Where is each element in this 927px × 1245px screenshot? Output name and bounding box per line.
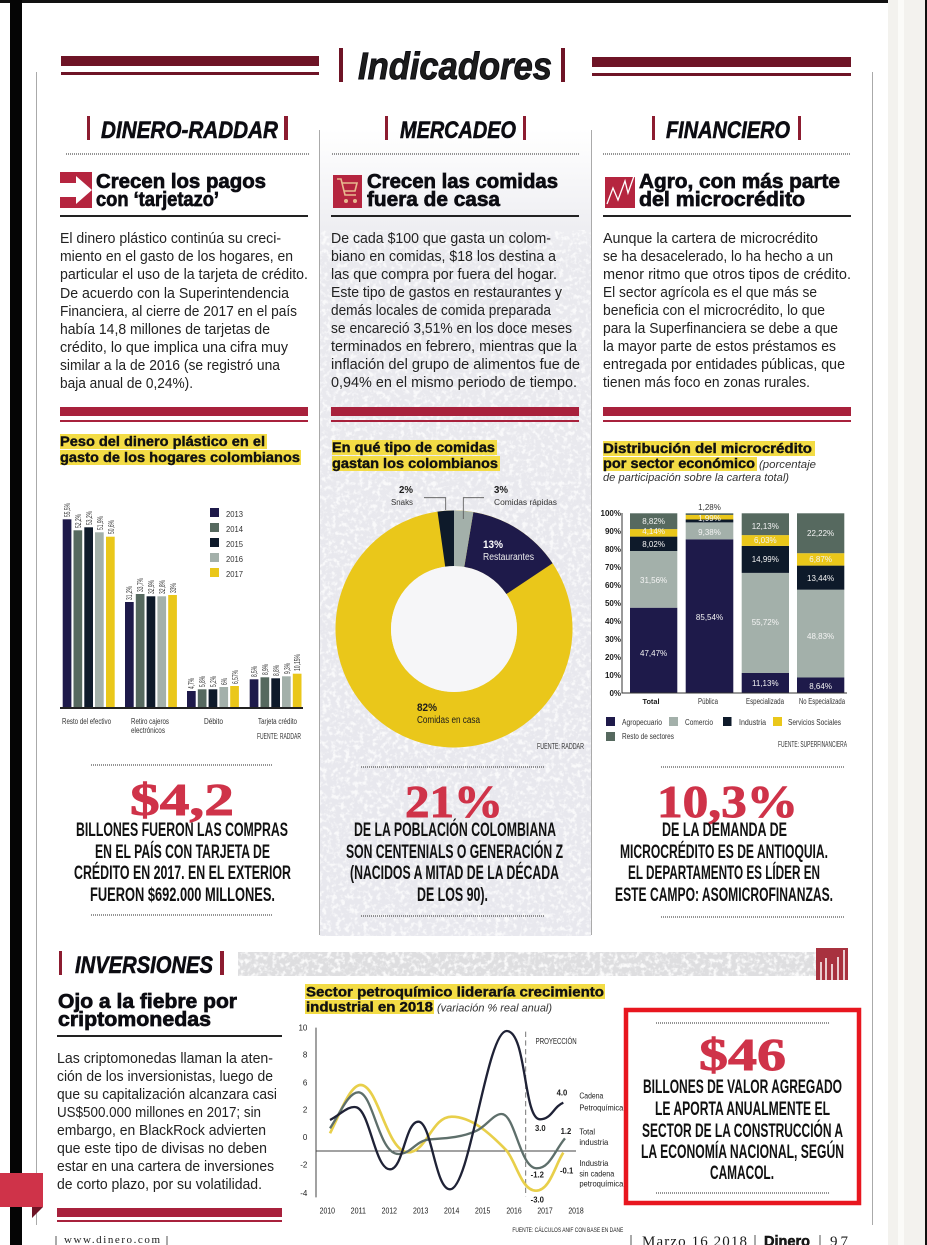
line chart: petroquímico: 0 (303, 1133, 308, 1142)
bar chart: peso del dinero plástico: 53,2% (85, 511, 94, 525)
bar chart: peso del dinero plástico: 50,6% (107, 520, 116, 534)
stacked bar chart: microcrédito: 8,02% (642, 540, 665, 549)
chart title: por sector económico (603, 455, 755, 471)
bar chart: peso del dinero plástico: 51,9% (96, 516, 105, 530)
legend: Resto de sectores (622, 732, 674, 741)
article text: de corto plazo, por su volatilidad. (57, 1177, 262, 1193)
line chart: petroquímico: 3.0 (535, 1124, 546, 1133)
icon: arrow (60, 172, 92, 208)
stacked bar chart: microcrédito: 20% (605, 653, 621, 662)
bar chart: peso del dinero plástico: 33% (169, 583, 178, 593)
bar chart: peso del dinero plástico: 33,7% (136, 578, 145, 592)
stacked bar chart: microcrédito: 8,64% (809, 682, 832, 691)
callout: $46 (626, 1010, 859, 1203)
article heading (60, 171, 308, 217)
stacked bar chart: microcrédito: 30% (605, 635, 621, 644)
section header: inversiones: INVERSIONES (75, 952, 213, 979)
stacked bar chart: microcrédito: 6,03% (754, 536, 777, 545)
article text (60, 231, 308, 392)
article text: había 14,8 millones de tarjetas de (60, 322, 270, 338)
line chart: petroquímico: 6 (303, 1078, 308, 1087)
article text: beneficia con el microcrédito, lo que (603, 303, 825, 319)
line chart: petroquímico: -3.0 (531, 1196, 545, 1205)
legend: FUENTE: SUPERFINANCIERA (778, 740, 847, 749)
chart title (305, 984, 605, 1014)
stacked bar chart: microcrédito: 0% (609, 689, 621, 698)
article text: que este tipo de divisas no deben (57, 1141, 267, 1157)
callout: 21% (346, 767, 563, 916)
bar chart: peso del dinero plástico: 52,2% (74, 514, 83, 528)
donut chart: tipo de comidas: Comidas en casa (417, 715, 480, 726)
stacked bar chart: microcrédito: 50% (605, 599, 621, 608)
section heading: dinero-raddar: DINERO-RADDAR (101, 117, 279, 144)
article heading: del microcrédito (639, 189, 805, 211)
stacked bar chart: microcrédito: 4,14% (642, 527, 665, 536)
bar chart: peso del dinero plástico: 5,2% (209, 676, 218, 687)
stacked bar chart: microcrédito: 1,28% (698, 503, 721, 512)
legend: Comercio (685, 718, 713, 727)
line chart: petroquímico: -1.2 (531, 1170, 545, 1179)
bar chart: peso del dinero plástico: 5,8% (198, 676, 207, 687)
stacked bar chart: microcrédito: 31,56% (640, 576, 667, 585)
bar chart: peso del dinero plástico: 6,57% (231, 670, 240, 684)
article text: miento en el gasto de los hogares, en (60, 249, 293, 265)
stacked bar chart: microcrédito: 8,82% (642, 517, 665, 526)
article heading (57, 991, 282, 1037)
section heading: dinero-raddar (66, 116, 309, 154)
section heading: mercadeo: MERCADEO (400, 117, 516, 144)
article text: De acuerdo con la Superintendencia (60, 286, 290, 302)
article text: entregada por entidades públicas, que (603, 357, 845, 373)
donut chart: tipo de comidas: Comidas rápidas (494, 498, 557, 507)
stacked bar chart: microcrédito: 85,54% (696, 613, 723, 622)
article text: terminados en febrero, mientras que la (331, 339, 578, 355)
line chart: petroquímico: 4.0 (557, 1089, 568, 1098)
stacked bar chart: microcrédito: 12,13% (752, 522, 779, 531)
callout: $46: CAMACOL. (710, 1163, 774, 1184)
line chart: petroquímico: FUENTE: CÁLCULOS ANIF CON BASE EN DANE (512, 1225, 624, 1234)
legend: Servicios Sociales (788, 718, 841, 727)
article text: las que compra por fuera del hogar. (331, 267, 557, 283)
line chart: petroquímico (298, 1023, 624, 1234)
stacked bar chart: microcrédito: 48,83% (807, 632, 834, 641)
article text: Financiera, al cierre de 2017 en el país (60, 304, 297, 320)
callout: 10,3%: DE LA DEMANDA DE (662, 820, 787, 841)
chart title: Peso del dinero plástico en el (60, 433, 265, 449)
section heading: mercadeo (332, 116, 579, 154)
bar chart: peso del dinero plástico: FUENTE: RADDAR (257, 732, 301, 741)
article text: se encareció 3,51% en los doce meses (331, 321, 572, 337)
article text (57, 1051, 277, 1193)
donut chart: tipo de comidas (363, 485, 584, 751)
bar chart: peso del dinero plástico: 8,8% (272, 665, 281, 676)
icon: bar chart (816, 948, 848, 980)
chart title: Sector petroquímico lideraría crecimiento (306, 984, 604, 1000)
stacked bar chart: microcrédito: Total (642, 697, 660, 706)
article text: tienen más foco en zonas rurales. (603, 375, 810, 391)
article heading: Agro, con más parte (639, 171, 840, 193)
section header: inversiones (59, 948, 848, 980)
article text (603, 231, 851, 391)
legend: 2013 (226, 510, 244, 519)
stacked bar chart: microcrédito: 13,44% (807, 574, 834, 583)
section heading: financiero: FINANCIERO (666, 117, 790, 144)
legend (606, 717, 847, 749)
callout: $4,2: CRÉDITO EN 2017. EN EL EXTERIOR (74, 862, 291, 884)
line chart: petroquímico: -2 (300, 1161, 308, 1170)
line chart: petroquímico: PROYECCIÓN (536, 1037, 577, 1046)
article text (331, 231, 580, 391)
article text: particular el uso de la tarjeta de crédito. (60, 267, 308, 283)
callout: $46: $46 (699, 1029, 786, 1080)
stacked bar chart: microcrédito: Especializada (746, 697, 784, 706)
bar chart: peso del dinero plástico: electrónicos (131, 726, 165, 735)
legend: Industria (739, 718, 766, 727)
page title: Indicadores (358, 46, 552, 88)
legend: 2015 (226, 540, 244, 549)
bar chart: peso del dinero plástico: 55,5% (63, 503, 72, 517)
article heading: criptomonedas (58, 1009, 211, 1031)
panel: financiero (601, 116, 851, 917)
line chart: petroquímico: industria (579, 1138, 609, 1147)
article text: la mayor parte de estos préstamos es (603, 339, 836, 355)
article heading: Crecen los pagos (96, 171, 266, 193)
callout: 21%: DE LA POBLACIÓN COLOMBIANA (354, 819, 556, 841)
page title (61, 46, 851, 88)
line chart: petroquímico: 2016 (506, 1206, 522, 1215)
line chart: petroquímico: Cadena (579, 1091, 604, 1100)
bar chart: peso del dinero plástico: 31,2% (125, 586, 134, 600)
bar chart: peso del dinero plástico (60, 503, 303, 741)
bar chart: peso del dinero plástico: Resto del efectivo (62, 717, 111, 726)
bar chart: peso del dinero plástico: 32,9% (147, 580, 156, 594)
line chart: petroquímico: Total (579, 1128, 595, 1137)
stacked bar chart: microcrédito: 47,47% (640, 649, 667, 658)
chart title: gastan los colombianos (332, 455, 498, 471)
article text: embargo, en BlackRock advierten (57, 1123, 266, 1139)
donut chart: tipo de comidas: 3% (494, 485, 508, 496)
line chart: petroquímico: Industria (579, 1159, 609, 1168)
article text: Las criptomonedas llaman la aten- (57, 1051, 273, 1067)
stacked bar chart: microcrédito: 9,38% (698, 528, 721, 537)
article text: demás locales de comida preparada (331, 303, 552, 319)
chart title: de participación sobre la cartera total) (603, 472, 789, 484)
article heading: Crecen las comidas (367, 171, 558, 193)
legend: 2017 (226, 570, 244, 579)
article text: baja anual de 0,24%). (60, 376, 193, 392)
donut chart: tipo de comidas: Restaurantes (483, 552, 534, 563)
bar chart: peso del dinero plástico: Tarjeta crédito (258, 717, 297, 726)
bar chart: peso del dinero plástico: 10,15% (293, 654, 302, 671)
article text: que su capitalización alcanzara casi (57, 1087, 277, 1103)
donut chart: tipo de comidas: 82% (417, 702, 437, 714)
stacked bar chart: microcrédito: 100% (601, 509, 621, 518)
article text: El dinero plástico continúa su creci- (60, 231, 281, 247)
icon: line chart (605, 176, 635, 208)
chart title: (variación % real anual) (437, 1002, 552, 1014)
panel: dinero-raddar (60, 116, 309, 915)
article heading: Ojo a la fiebre por (58, 991, 237, 1013)
callout: $4,2: EN EL PAÍS CON TARJETA DE (95, 841, 270, 863)
legend: 2014 (226, 525, 244, 534)
bar chart: peso del dinero plástico: Retiro cajeros (131, 717, 169, 726)
article text: estar en una cartera de inversiones (57, 1159, 274, 1175)
article heading (603, 171, 851, 217)
line chart: petroquímico: 2010 (320, 1206, 335, 1215)
stacked bar chart: microcrédito: 40% (605, 617, 621, 626)
line chart: petroquímico: -0.1 (560, 1166, 574, 1175)
article text: Este tipo de gastos en restaurantes y (331, 285, 563, 301)
callout: $4,2 (74, 765, 291, 915)
callout: $46: LE APORTA ANUALMENTE EL (655, 1099, 830, 1120)
callout: $4,2: FUERON $692.000 MILLONES. (90, 885, 275, 906)
stacked bar chart: microcrédito: 70% (605, 563, 621, 572)
article text: similar a la de 2016 (se registró una (60, 358, 281, 374)
line chart: petroquímico: 8 (303, 1051, 308, 1060)
stacked bar chart: microcrédito: 11,13% (752, 679, 779, 688)
article text: US$500.000 millones en 2017; sin (57, 1105, 261, 1121)
article text: se ha desacelerado, lo ha hecho a un (603, 249, 833, 265)
stacked bar chart: microcrédito: 90% (605, 527, 621, 536)
legend: Agropecuario (622, 718, 662, 727)
article text: El sector agrícola es el que más se (603, 285, 817, 301)
stacked bar chart: microcrédito (601, 503, 847, 749)
line chart: petroquímico: 2015 (475, 1206, 491, 1215)
stacked bar chart: microcrédito: No Especializada (799, 697, 845, 706)
legend: 2016 (226, 555, 244, 564)
article text: inflación del grupo de alimentos fue de (331, 357, 580, 373)
article heading: con ‘tarjetazo’ (96, 189, 219, 211)
bar chart: peso del dinero plástico: Débito (204, 717, 223, 726)
callout: $4,2: BILLONES FUERON LAS COMPRAS (76, 820, 288, 841)
line chart: petroquímico: petroquímica (579, 1180, 624, 1189)
chart title (332, 439, 500, 471)
article text: 0,94% en el mismo periodo de tiempo. (331, 375, 577, 391)
callout: 21%: SON CENTENIALS O GENERACIÓN Z (346, 841, 563, 863)
article heading: fuera de casa (367, 189, 501, 211)
stacked bar chart: microcrédito: 55,72% (752, 618, 779, 627)
callout: 21%: (NACIDOS A MITAD DE LA DÉCADA (350, 862, 559, 884)
line chart: petroquímico: 2017 (537, 1206, 553, 1215)
article text: menor ritmo que otros tipos de crédito. (603, 267, 851, 283)
article heading (331, 171, 579, 217)
line chart: petroquímico: -4 (300, 1189, 308, 1198)
stacked bar chart: microcrédito: Pública (698, 697, 718, 706)
line chart: petroquímico: Petroquímica (579, 1104, 624, 1113)
article text: Aunque la cartera de microcrédito (603, 231, 818, 247)
article text: De cada $100 que gasta un colom- (331, 231, 551, 247)
chart title (60, 433, 301, 465)
stacked bar chart: microcrédito: 6,87% (809, 555, 832, 564)
stacked bar chart: microcrédito: 22,22% (807, 529, 834, 538)
chart title (603, 440, 816, 484)
icon: shopping cart (333, 175, 362, 208)
ribbon tab (0, 1173, 43, 1218)
stacked bar chart: microcrédito: 80% (605, 545, 621, 554)
legend (210, 508, 244, 579)
section heading: financiero (603, 116, 851, 154)
footer right: date and folio (631, 1233, 848, 1245)
line chart: petroquímico: 1.2 (561, 1127, 572, 1136)
callout: $4,2: $4,2 (130, 774, 234, 825)
donut chart: tipo de comidas: Snaks (391, 498, 413, 507)
donut chart: tipo de comidas: 2% (399, 485, 413, 496)
line chart: petroquímico: 2011 (351, 1206, 366, 1215)
line chart: petroquímico: 2013 (413, 1206, 429, 1215)
bar chart: peso del dinero plástico: 6% (220, 678, 229, 685)
donut chart: tipo de comidas: FUENTE: RADDAR (537, 742, 584, 751)
article text: crédito, lo que implica una cifra muy (60, 340, 289, 356)
line chart: petroquímico: sin cadena (579, 1170, 615, 1179)
stacked bar chart: microcrédito: 14,99% (752, 555, 779, 564)
chart title: industrial en 2018 (306, 998, 433, 1014)
callout: 21%: DE LOS 90). (417, 885, 488, 906)
panel: ojo a la fiebre (57, 991, 282, 1222)
bar chart: peso del dinero plástico: 8,5% (250, 666, 259, 677)
line chart: petroquímico: 10 (298, 1023, 308, 1032)
chart title: gasto de los hogares colombianos (60, 449, 300, 465)
article text: biano en comidas, $18 los destina a (331, 249, 557, 265)
bar chart: peso del dinero plástico: 8,9% (261, 664, 270, 675)
line chart: petroquímico: 2012 (382, 1206, 397, 1215)
bar chart: peso del dinero plástico: 32,8% (158, 580, 167, 594)
bar chart: peso del dinero plástico: 9,3% (283, 663, 292, 674)
callout: 10,3% (615, 767, 845, 917)
line chart: petroquímico: 2018 (568, 1206, 584, 1215)
callout: 21%: 21% (405, 776, 503, 827)
stacked bar chart: microcrédito: 1,99% (698, 514, 721, 523)
article text: ción de los inversionistas, luego de (57, 1069, 273, 1085)
callout: 10,3%: 10,3% (657, 776, 798, 827)
chart title: Distribución del microcrédito (603, 440, 812, 456)
stacked bar chart: microcrédito: 60% (605, 581, 621, 590)
bar chart: peso del dinero plástico: 4,7% (187, 678, 196, 689)
stacked bar chart: microcrédito: 10% (605, 671, 621, 680)
line chart: petroquímico: 2 (303, 1106, 308, 1115)
chart title: (porcentaje (759, 459, 816, 471)
article text: para la Superfinanciera se debe a que (603, 321, 838, 337)
donut chart: tipo de comidas: 13% (483, 539, 503, 551)
chart title: En qué tipo de comidas (332, 439, 495, 455)
line chart: petroquímico: 2014 (444, 1206, 460, 1215)
panel: mercadeo (331, 116, 584, 916)
